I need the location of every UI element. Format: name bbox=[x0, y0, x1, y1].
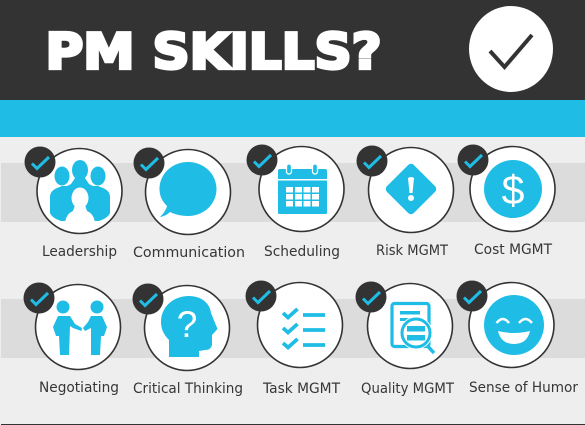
skill: Scheduling bbox=[246, 144, 344, 260]
check badge bbox=[356, 282, 386, 312]
skill: Negotiating bbox=[24, 282, 120, 396]
label: Scheduling bbox=[264, 244, 340, 260]
row band: bottom bbox=[1, 299, 585, 358]
label: Negotiating bbox=[39, 380, 119, 396]
check badge bbox=[356, 146, 388, 176]
label: Communication bbox=[133, 245, 245, 261]
check badge bbox=[246, 144, 278, 176]
label: Risk MGMT bbox=[376, 243, 448, 259]
skill: Critical Thinking bbox=[132, 284, 243, 397]
icon: two people shaking hands bbox=[53, 300, 107, 355]
check badge bbox=[456, 280, 488, 312]
skill: Leadership bbox=[24, 146, 122, 260]
skill: Risk MGMT bbox=[356, 146, 454, 259]
check badge bbox=[246, 280, 276, 312]
cyan band bbox=[0, 100, 585, 137]
icon: people group bbox=[50, 160, 110, 229]
icon: laughing face bbox=[484, 295, 544, 355]
check badge bbox=[24, 282, 54, 314]
header bar bbox=[0, 0, 585, 100]
skill: Communication bbox=[133, 148, 245, 261]
label: Quality MGMT bbox=[361, 381, 454, 397]
check badge bbox=[24, 146, 56, 178]
skill: Task MGMT bbox=[246, 280, 342, 397]
icon: dollar coin: $ bbox=[502, 167, 525, 213]
icon: document with magnifier bbox=[392, 304, 434, 353]
icon: calendar bbox=[278, 164, 327, 214]
check badge bbox=[458, 144, 488, 176]
icon: speech bubble bbox=[160, 162, 216, 217]
skill: Sense of Humor bbox=[456, 280, 578, 396]
label: Task MGMT bbox=[262, 381, 340, 397]
skill: Cost MGMT bbox=[458, 144, 555, 258]
icon: header check badge bbox=[469, 6, 553, 92]
row band: top bbox=[1, 163, 585, 222]
check badge bbox=[134, 148, 164, 178]
label: Sense of Humor bbox=[469, 380, 578, 396]
skill: Quality MGMT bbox=[356, 282, 454, 397]
label: Leadership bbox=[42, 244, 117, 260]
title: PM SKILLS? bbox=[46, 24, 382, 80]
label: Cost MGMT bbox=[474, 242, 552, 258]
icon: head with question mark: ? bbox=[177, 304, 197, 345]
check badge bbox=[132, 284, 164, 314]
label: Critical Thinking bbox=[133, 381, 243, 397]
icon: checklist bbox=[283, 309, 325, 348]
icon: warning diamond bbox=[384, 162, 438, 216]
